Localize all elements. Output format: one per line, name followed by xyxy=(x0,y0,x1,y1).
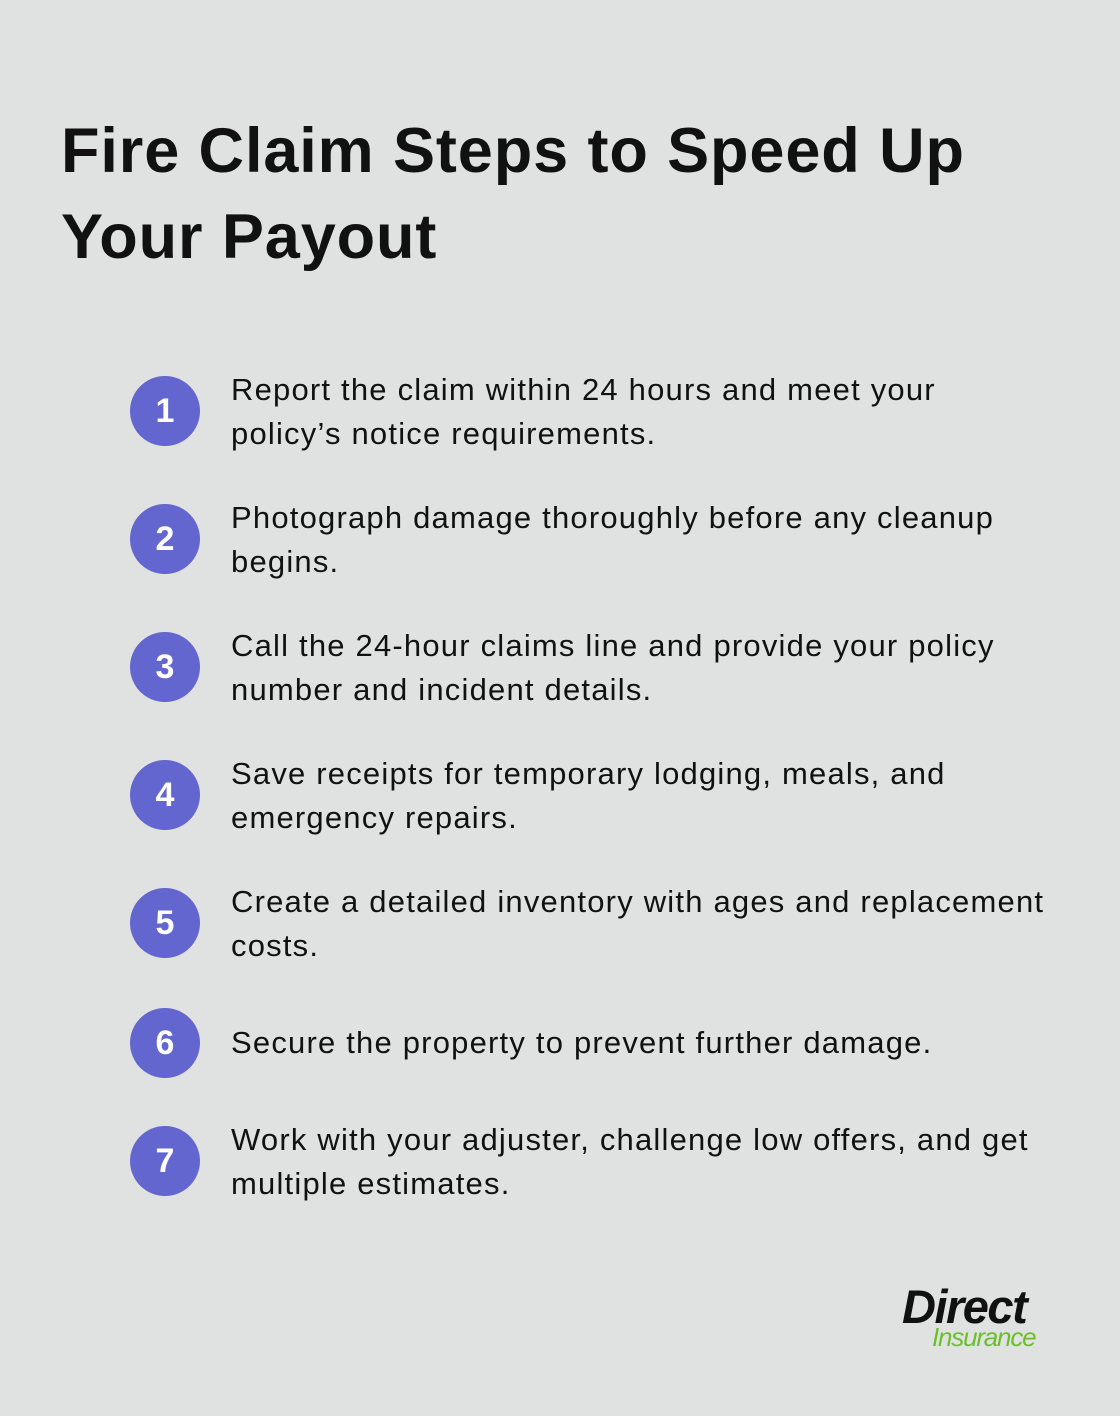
step 2 xyxy=(130,500,994,579)
step 6: Secure the property to prevent further damage. xyxy=(231,1025,932,1060)
step 6: 6 xyxy=(156,1024,174,1062)
step 4: Save receipts for temporary lodging, meals, and xyxy=(231,756,946,791)
step 5: Create a detailed inventory with ages and replacement xyxy=(231,884,1044,919)
step 6 xyxy=(130,1008,932,1078)
step 1: Report the claim within 24 hours and meet your xyxy=(231,372,936,407)
logo xyxy=(902,1280,1036,1352)
step 3: 3 xyxy=(156,648,174,686)
title xyxy=(61,116,965,272)
logo: Insurance xyxy=(932,1322,1035,1352)
step 2: begins. xyxy=(231,544,339,579)
step 2: 2 xyxy=(156,520,174,558)
title: Fire Claim Steps to Speed Up xyxy=(61,116,965,186)
step 5 xyxy=(130,884,1044,963)
step 1: 1 xyxy=(156,392,174,430)
step 4: 4 xyxy=(156,776,174,814)
step 5: costs. xyxy=(231,928,319,963)
step 4 xyxy=(130,756,946,835)
logo: Direct xyxy=(902,1280,1026,1333)
step 1 xyxy=(130,372,936,451)
step 1: policy’s notice requirements. xyxy=(231,416,656,451)
step 5: 5 xyxy=(156,904,174,942)
step 7: 7 xyxy=(156,1142,174,1180)
step 3 xyxy=(130,628,995,707)
step 3: Call the 24-hour claims line and provide your policy xyxy=(231,628,995,663)
step 2: Photograph damage thoroughly before any cleanup xyxy=(231,500,994,535)
step 7: multiple estimates. xyxy=(231,1166,511,1201)
step 3: number and incident details. xyxy=(231,672,652,707)
step 7: Work with your adjuster, challenge low offers, and get xyxy=(231,1122,1029,1157)
step 4: emergency repairs. xyxy=(231,800,518,835)
step 7 xyxy=(130,1122,1029,1201)
title: Your Payout xyxy=(61,202,437,272)
